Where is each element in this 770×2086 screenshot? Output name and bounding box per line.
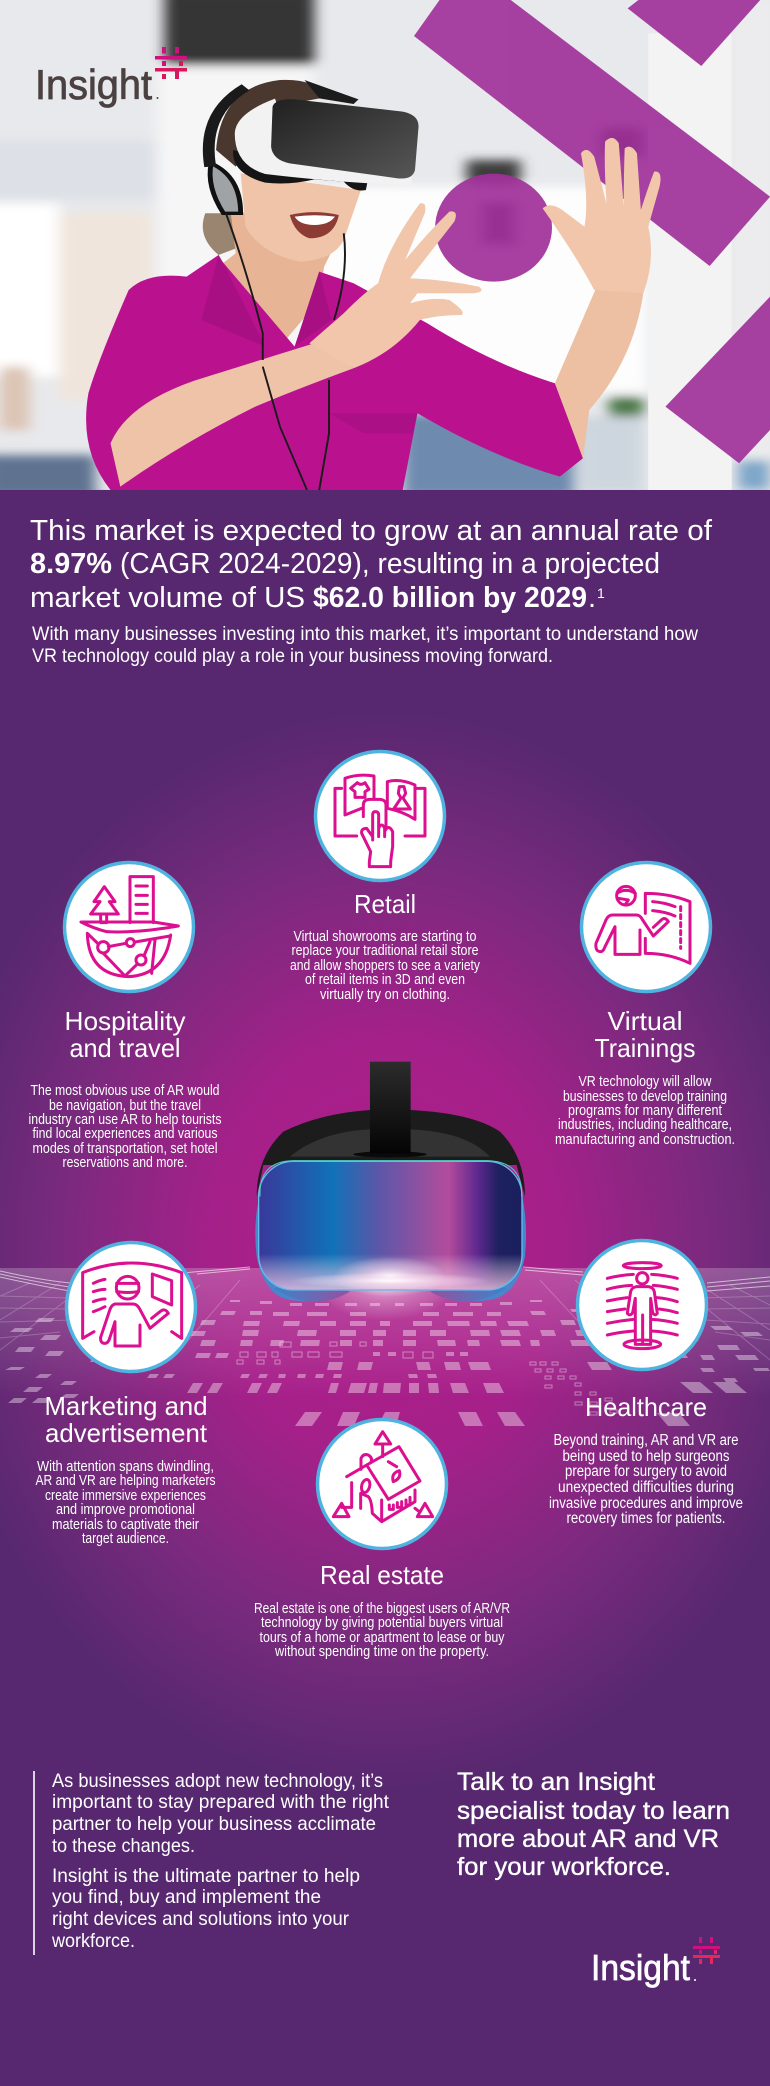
text: virtual trainings [555,1074,735,1148]
intro subtext: VR technology could play a role in your business moving forward. [32,645,553,667]
panel: real estate [254,1420,510,1660]
intro headline [30,515,713,614]
intro headline: 8.97% [30,548,112,580]
intro headline: 1 [597,585,605,601]
heading: virtual trainings: Virtual [608,1006,682,1036]
panel: retail [290,752,481,1003]
intro subtext: With many businesses investing into this market, it’s important to understand how [32,623,699,645]
intro headline: This market is expected to grow at an annual rate of [30,515,713,547]
heading: retail: Retail [354,889,416,919]
closing text block: partner to help your business acclimate [52,1813,376,1835]
text: healthcare: being used to help surgeons [562,1448,730,1465]
text: retail: Virtual showrooms are starting to [294,929,476,945]
text: marketing: target audience. [82,1531,169,1547]
call to action: Talk to an Insight [457,1768,655,1796]
heading: hospitality: Hospitality [64,1006,186,1036]
closing text block: important to stay prepared with the right [52,1791,390,1813]
logo mark [155,47,187,79]
text: marketing: and improve promotional [56,1502,195,1518]
call to action: more about AR and VR [457,1825,719,1853]
text: marketing: With attention spans dwindling, [37,1459,214,1475]
text: marketing [36,1459,216,1547]
heading: marketing [44,1391,208,1448]
woman with VR headset [86,80,661,490]
text: healthcare: Beyond training, AR and VR are [554,1432,738,1449]
closing text block: workforce. [51,1930,135,1952]
intro headline: market volume of US [30,582,305,614]
text: virtual trainings: businesses to develop training [563,1089,727,1105]
logo: Insight bottom [591,1937,720,1988]
text: hospitality: be navigation, but the travel [49,1098,201,1114]
heading: marketing: advertisement [45,1418,208,1448]
text: hospitality: modes of transportation, set hotel [32,1141,218,1157]
logo: Insight top: Insight [35,61,152,108]
text: real estate [254,1601,510,1660]
icon: marketing [66,1242,196,1372]
text: healthcare [549,1432,743,1527]
heading: marketing: Marketing and [44,1391,208,1421]
text: virtual trainings: programs for many different [568,1103,722,1119]
text: retail [290,929,481,1003]
text: virtual trainings: VR technology will allow [578,1074,712,1090]
text: hospitality: The most obvious use of AR would [30,1083,220,1099]
text: real estate: tours of a home or apartment to lease or buy [260,1630,505,1646]
radial magenta glow [0,490,770,2086]
closing text block: right devices and solutions into your [52,1908,349,1930]
digital grid floor [0,1250,770,1426]
text: retail: virtually try on clothing. [320,987,450,1003]
closing text block [33,1770,390,1955]
text: real estate: Real estate is one of the biggest users of AR/VR [254,1601,510,1617]
intro headline: $62.0 billion by 2029 [313,582,587,614]
logo: Insight top [35,47,187,108]
heading: virtual trainings: Trainings [594,1033,696,1063]
text: retail: and allow shoppers to see a variety [290,958,481,974]
text: healthcare: recovery times for patients. [566,1510,726,1527]
icon: hospitality globe [64,862,194,992]
text: marketing: AR and VR are helping marketers [36,1473,216,1489]
text: virtual trainings: industries, including healthcare, [558,1117,732,1133]
VR headset illustration [255,1062,526,1302]
icon: retail catalog [316,752,444,880]
logo: Insight bottom: Insight [591,1947,690,1988]
panel: virtual trainings [555,862,735,1148]
intro headline: . [588,582,596,614]
text: retail: of retail items in 3D and even [305,972,465,988]
headset blue side pads [255,1193,526,1301]
text: healthcare: prepare for surgery to avoid [565,1463,727,1480]
text: hospitality [28,1083,222,1171]
panel: marketing and advertisement [36,1242,216,1547]
text: healthcare: unexpected difficulties during [558,1479,734,1496]
text: healthcare: invasive procedures and improve [549,1495,743,1512]
text: real estate: without spending time on the property. [274,1644,489,1660]
logo mark [693,1937,720,1964]
headset shell [257,1110,525,1197]
heading: hospitality: and travel [70,1033,180,1063]
heading: real estate: Real estate [320,1560,444,1590]
purple geometric shapes [414,0,770,463]
text: marketing: create immersive experiences [45,1488,206,1504]
panel: hospitality and travel [28,862,222,1171]
closing text block: Insight is the ultimate partner to help [52,1865,360,1887]
hero photo [0,0,770,498]
text: virtual trainings: manufacturing and construction. [555,1132,735,1148]
call to action [457,1768,730,1881]
headset lens [259,1161,522,1290]
text: hospitality: find local experiences and various [32,1126,218,1142]
closing text block: As businesses adopt new technology, it’s [52,1770,383,1792]
heading: hospitality [64,1006,186,1063]
intro headline: (CAGR 2024-2029), resulting in a projected [120,548,660,580]
icon: real estate house [318,1420,446,1548]
heading: healthcare: Healthcare [585,1392,707,1422]
call to action: for your workforce. [457,1853,671,1881]
heading: virtual trainings [594,1006,696,1063]
text: hospitality: industry can use AR to help tourists [28,1112,222,1128]
text: marketing: materials to captivate their [52,1517,199,1533]
call to action: specialist today to learn [457,1797,730,1825]
closing text block: to these changes. [52,1835,195,1857]
panel: healthcare [549,1240,743,1527]
text: real estate: technology by giving potential buyers virtual [261,1615,503,1631]
text: hospitality: reservations and more. [62,1155,188,1171]
closing text block: you find, buy and implement the [52,1886,321,1908]
icon: virtual training [582,862,710,992]
headset strap [370,1062,411,1153]
icon: healthcare body scan [578,1240,706,1370]
text: retail: replace your traditional retail store [292,943,478,959]
intro subtext [32,623,699,667]
